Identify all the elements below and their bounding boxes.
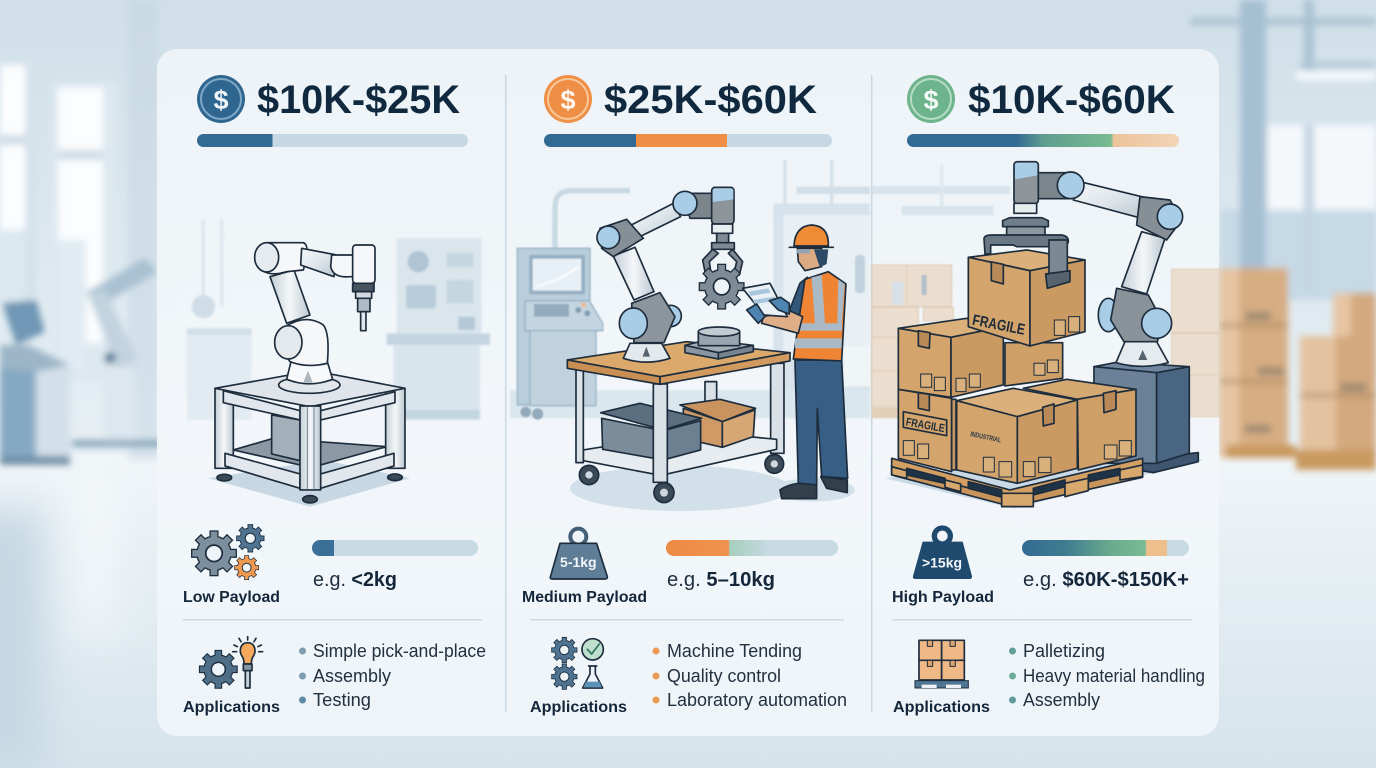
price icon: dollar coin green: $	[923, 85, 939, 115]
payload icon: weight >15kg	[913, 528, 972, 579]
robot forearm	[630, 203, 681, 237]
payload label: Low Payload	[183, 589, 280, 606]
applications label: Applications	[183, 699, 280, 716]
robot upper arm	[270, 270, 310, 323]
pallet	[892, 458, 1143, 507]
background robot arm	[72, 258, 178, 447]
gear workpiece	[700, 265, 743, 308]
price bar	[544, 134, 832, 147]
wheels	[579, 455, 784, 503]
column 3: high payload	[872, 75, 1219, 716]
robot upper arm	[1122, 232, 1165, 294]
payload example: e.g. 5–10kg	[667, 569, 775, 591]
faded bench background	[187, 220, 490, 420]
cart legs	[576, 369, 667, 482]
applications list: Machine Tending	[667, 641, 802, 661]
applications icon: boxes on pallet	[915, 640, 968, 688]
cardboard box	[680, 399, 756, 447]
robot base	[279, 377, 340, 393]
workpiece	[685, 327, 753, 359]
payload bar	[1022, 540, 1189, 556]
center back box	[1005, 343, 1063, 386]
applications list: Simple pick-and-place	[313, 641, 486, 661]
illustration: robot on aluminium frame	[187, 220, 490, 507]
robot back joint	[1098, 298, 1118, 332]
faded warehouse background	[872, 165, 1219, 418]
forearm	[762, 311, 803, 333]
robot upper arm	[613, 247, 654, 300]
robot base	[1116, 342, 1168, 366]
column divider left	[505, 75, 506, 712]
applications label: Applications	[530, 699, 627, 716]
applications list: Testing	[313, 690, 371, 710]
top box labelled fragile: FRAGILE	[971, 312, 1026, 339]
hi-vis vest	[793, 272, 846, 361]
column 1: low payload	[183, 75, 490, 716]
applications list: Assembly	[1023, 690, 1100, 710]
applications list: Assembly	[313, 666, 391, 686]
price icon: dollar coin orange	[544, 75, 592, 123]
payload example: e.g. $60K-$150K+	[1023, 569, 1189, 591]
shirt	[789, 277, 808, 317]
payload bar	[312, 540, 478, 556]
price icon: dollar coin blue: $	[213, 85, 229, 115]
payload label: Medium Payload	[522, 589, 647, 606]
price bar	[197, 134, 468, 147]
robot tool	[353, 283, 374, 331]
floor shadow	[885, 450, 1203, 508]
right window and column	[1190, 0, 1376, 300]
applications icon: gear and bulb	[200, 637, 263, 688]
tablet	[743, 283, 787, 317]
applications list: Heavy material handling	[1023, 666, 1205, 686]
feet	[217, 474, 402, 503]
gloves	[747, 304, 765, 323]
back legs	[705, 363, 784, 453]
applications list: Palletizing	[1023, 641, 1105, 661]
top box labelled fragile	[968, 250, 1085, 346]
floor shadows	[570, 466, 790, 511]
gripper	[703, 233, 743, 277]
applications list	[299, 641, 486, 710]
column divider right	[871, 75, 872, 712]
left machine	[0, 300, 70, 465]
front leg	[300, 406, 321, 490]
applications list	[1009, 641, 1205, 710]
trousers	[795, 360, 848, 485]
table top	[215, 371, 405, 407]
floor shadow	[208, 460, 410, 507]
payload icon: gears	[192, 525, 264, 579]
center lower box: INDUSTRIAL	[970, 431, 1002, 445]
back legs	[215, 388, 405, 468]
left windows	[0, 0, 158, 460]
price icon: dollar coin blue	[197, 75, 245, 123]
robot shoulder	[632, 293, 675, 343]
robot shoulder	[280, 320, 328, 365]
center lower box	[957, 388, 1077, 483]
robot wrist	[1033, 173, 1072, 199]
payload icon: weight 5-1kg	[550, 529, 607, 579]
robot wrist	[683, 193, 713, 218]
back lower box	[1023, 379, 1136, 470]
applications list: Laboratory automation	[667, 690, 847, 710]
robot forearm	[301, 248, 337, 277]
left lower box: FRAGILE	[905, 416, 946, 435]
right stacked boxes	[1219, 268, 1376, 470]
head	[797, 248, 822, 271]
applications list: Quality control	[667, 666, 781, 686]
illustration: robot palletizing boxes	[872, 162, 1219, 508]
price icon: dollar coin orange: $	[560, 85, 576, 115]
price heading: $25K-$60K	[604, 78, 817, 122]
shelf and box	[233, 415, 387, 465]
box handling symbols	[903, 317, 1131, 477]
payload bar	[666, 540, 838, 556]
pedestal	[1094, 362, 1198, 473]
faded machine background	[510, 160, 870, 420]
price heading: $10K-$25K	[257, 78, 460, 122]
frame beams	[223, 391, 395, 488]
column 2: medium payload	[510, 75, 870, 716]
table top	[567, 342, 790, 384]
applications icon: gears, check, flask	[552, 638, 603, 689]
robot elbow	[600, 219, 643, 257]
applications label: Applications	[893, 699, 990, 716]
price icon: dollar coin green	[907, 75, 955, 123]
left lower box	[898, 389, 956, 472]
payload icon: weight >15kg: >15kg	[922, 555, 962, 571]
main frosted panel	[157, 49, 1219, 736]
dark bin	[601, 403, 702, 460]
payload icon: weight 5-1kg: 5-1kg	[560, 554, 597, 570]
robot elbow	[1137, 197, 1182, 240]
boots	[780, 483, 817, 499]
cart shelf	[583, 432, 777, 474]
robot forearm	[1073, 182, 1148, 218]
price bar	[907, 134, 1179, 147]
robot elbow	[262, 243, 307, 274]
robot shoulder	[1111, 288, 1163, 342]
gripper	[984, 218, 1070, 288]
hard hat	[794, 225, 828, 246]
robot back joint	[660, 305, 681, 327]
robot wrist	[331, 255, 355, 277]
payload example: e.g. <2kg	[313, 569, 397, 591]
worker	[743, 225, 848, 499]
price heading: $10K-$60K	[968, 78, 1175, 122]
left upper box	[898, 318, 1003, 397]
illustration: robot with worker at cart	[510, 160, 870, 511]
payload label: High Payload	[892, 589, 994, 606]
robot base	[623, 343, 670, 362]
applications list	[652, 641, 847, 710]
